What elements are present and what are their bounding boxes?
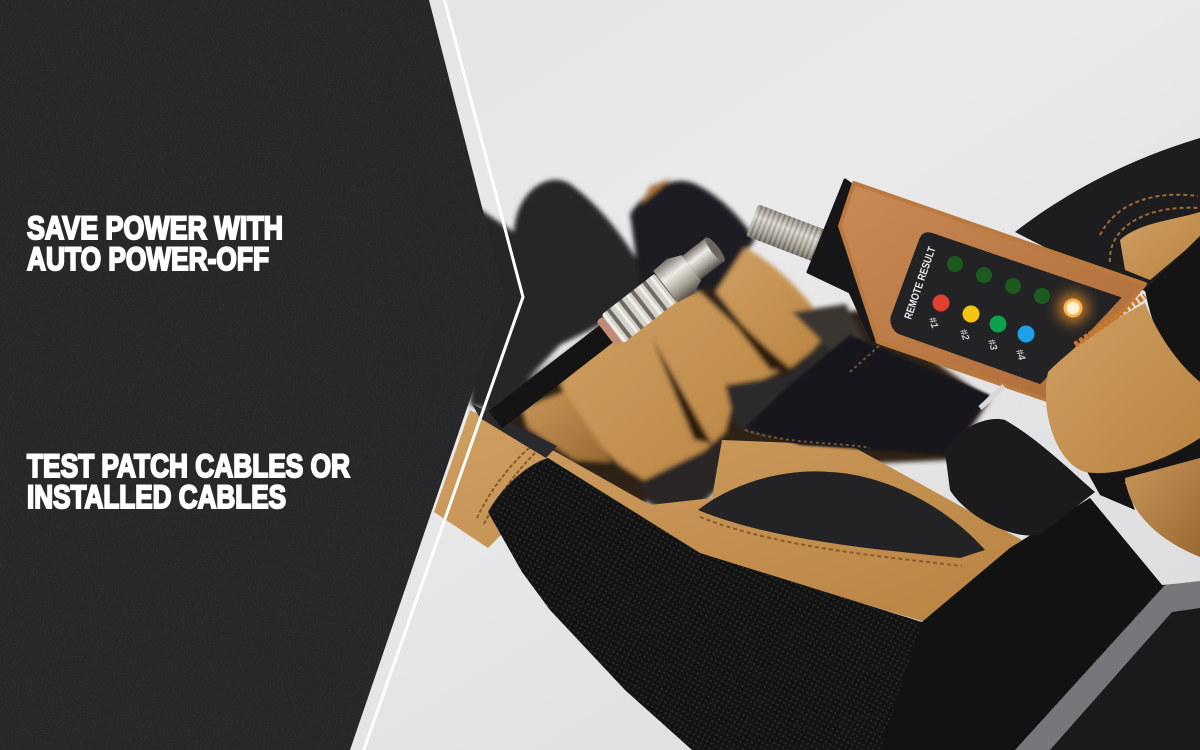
number labels: #2 <box>957 328 971 342</box>
left dark panel <box>0 0 510 750</box>
text: save power <box>27 210 283 277</box>
hex nut <box>653 250 705 305</box>
lower right finger <box>1125 458 1200 557</box>
number labels <box>926 316 1027 362</box>
connector tip <box>682 238 724 280</box>
back fingers, out of focus <box>470 178 990 515</box>
holding hand, black palm under tester <box>745 335 990 455</box>
number labels: #1 <box>926 316 940 330</box>
gray cuff band <box>1015 581 1200 750</box>
palm, tan leather <box>434 410 1022 622</box>
cable and connector <box>482 230 732 437</box>
number labels: #3 <box>985 338 999 352</box>
lit stitch glow <box>1075 296 1145 345</box>
text: test patch cables <box>27 448 350 515</box>
text: save power: AUTO POWER-OFF <box>27 241 269 277</box>
right hand, black upper finger <box>1015 138 1200 292</box>
indicator LEDs <box>932 256 1050 342</box>
text: save power: SAVE POWER WITH <box>27 210 283 246</box>
right hand, tan thumb <box>1046 303 1200 473</box>
amber glowing LED <box>1058 293 1088 323</box>
photo: gloved hand holding coax tester <box>434 138 1200 750</box>
tester threaded connector <box>746 204 825 262</box>
crimp collar <box>596 316 622 347</box>
palm stitching <box>745 345 880 448</box>
number labels: #4 <box>1013 348 1027 362</box>
pad stitching <box>700 517 962 566</box>
thumb dark strip <box>472 404 557 458</box>
black fingertip <box>945 419 1095 536</box>
upper finger stitching <box>1100 195 1198 262</box>
dark band between thumb and lower finger <box>1085 425 1200 510</box>
right-corner cuff, black <box>1050 608 1200 750</box>
main glove, black knit <box>488 458 1200 750</box>
thumb stitching <box>477 447 536 524</box>
sliver of white glove edge <box>980 386 1004 408</box>
right hand, black finger over tester <box>1145 236 1200 392</box>
tester <box>808 180 1145 400</box>
result panel <box>891 233 1120 383</box>
white chevron outline <box>363 0 523 750</box>
crimp body <box>601 273 677 343</box>
label: remote result: REMOTE RESULT <box>902 245 939 321</box>
right hand, tan finger section <box>1120 212 1200 280</box>
palm dark grip pad <box>698 471 985 558</box>
tester orange body <box>840 183 1145 400</box>
text: test patch cables: TEST PATCH CABLES OR <box>27 448 350 484</box>
text: test patch cables: INSTALLED CABLES <box>27 479 286 515</box>
tester black nose <box>808 180 885 340</box>
wrist section, solid black <box>880 498 1162 750</box>
coax cable <box>489 324 614 428</box>
panel grunge texture <box>0 0 510 750</box>
